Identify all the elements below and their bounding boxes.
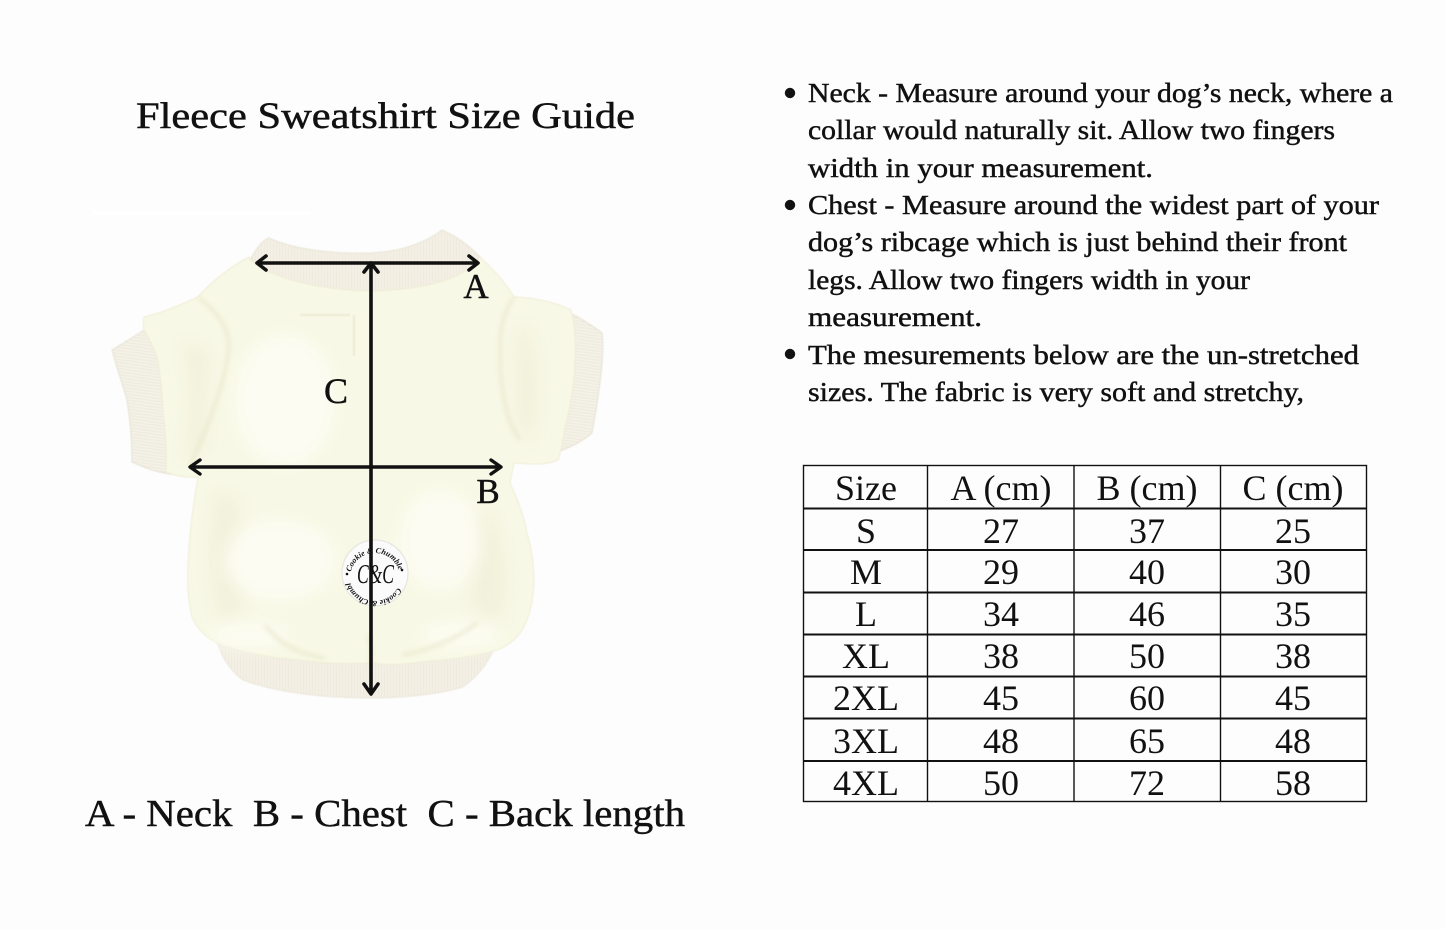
bullet: chest: legs. Allow two fingers width in your [808,265,1250,295]
label A: A [463,267,489,306]
arrow A: neck [257,256,478,270]
row 2XL: 2XL [833,678,899,718]
row 4XL: 58 [1275,763,1311,803]
row XL: 38 [983,636,1019,676]
row S: 37 [1129,511,1165,551]
row 2XL: 60 [1129,678,1165,718]
seams and hem folds [190,297,520,665]
row 3XL: 65 [1129,721,1165,761]
fleece body [143,257,575,664]
left sleeve cuff [112,330,180,475]
badge: Cookie and Chumble logo [342,540,408,606]
row M: 40 [1129,552,1165,592]
header row: C (cm) [1243,468,1343,508]
label B: B [476,472,500,511]
collar rib [249,230,482,296]
badge: Cookie and Chumble logo: Cookie & Chumble [346,548,402,572]
badge: Cookie and Chumble logo: C&C [357,559,395,589]
bullet: chest [785,190,1379,332]
row M: M [850,552,882,592]
badge: Cookie and Chumble logo: Cookie & Chumble [344,583,401,606]
sweatshirt photo [112,230,603,698]
bullet: un-stretched sizes: sizes. The fabric is very soft and stretchy, [808,377,1304,407]
back seam tag [300,315,354,356]
row 3XL: 48 [1275,721,1311,761]
hem rib [215,636,497,698]
label C: C [324,371,348,411]
arrow B: chest [190,460,501,474]
row S: 25 [1275,511,1311,551]
row L [855,594,1311,634]
fleece shading [180,320,539,625]
row 4XL: 72 [1129,763,1165,803]
row XL: XL [842,636,890,676]
sweatshirt diagram [111,229,604,699]
row 4XL [833,763,1311,803]
bullet: neck: width in your measurement. [808,153,1153,183]
header row: Size [835,468,897,508]
row L: L [855,594,877,634]
table grid [803,465,1367,802]
row S: S [856,511,876,551]
bullet: chest: Chest - Measure around the widest part of your [808,190,1379,220]
bullet: un-stretched sizes: The mesurements below are the un-stretched [808,340,1360,370]
row 2XL [833,678,1311,718]
row M: 29 [983,552,1019,592]
arrow C: back length [364,263,378,694]
row 4XL: 4XL [833,763,899,803]
row XL [842,636,1311,676]
bullet: neck: Neck - Measure around your dog’s neck, where a [808,78,1393,108]
row S [856,511,1311,551]
fleece highlights [210,335,500,647]
header row [835,468,1343,508]
row 2XL: 45 [983,678,1019,718]
bullet: chest: dog’s ribcage which is just behind their front [808,227,1348,257]
bullet: un-stretched sizes [785,340,1360,407]
title: Fleece Sweatshirt Size Guide [136,96,635,137]
row L: 46 [1129,594,1165,634]
right sleeve cuff [545,311,603,452]
row S: 27 [983,511,1019,551]
row 3XL: 3XL [833,721,899,761]
bullet: neck [785,78,1393,183]
bullet: neck: collar would naturally sit. Allow two fingers [808,115,1335,145]
header row: A (cm) [951,468,1051,508]
row 3XL [833,721,1311,761]
row 4XL: 50 [983,763,1019,803]
row XL: 38 [1275,636,1311,676]
bullet: chest: measurement. [808,302,982,332]
size table [803,465,1367,803]
header row: B (cm) [1097,468,1197,508]
legend caption: A - Neck B - Chest C - Back length [85,793,685,835]
row XL: 50 [1129,636,1165,676]
row 3XL: 48 [983,721,1019,761]
row M [850,552,1311,592]
measuring instructions [785,78,1393,407]
faint white artefact arrow [93,211,310,215]
row L: 34 [983,594,1019,634]
row 2XL: 45 [1275,678,1311,718]
row M: 30 [1275,552,1311,592]
row L: 35 [1275,594,1311,634]
